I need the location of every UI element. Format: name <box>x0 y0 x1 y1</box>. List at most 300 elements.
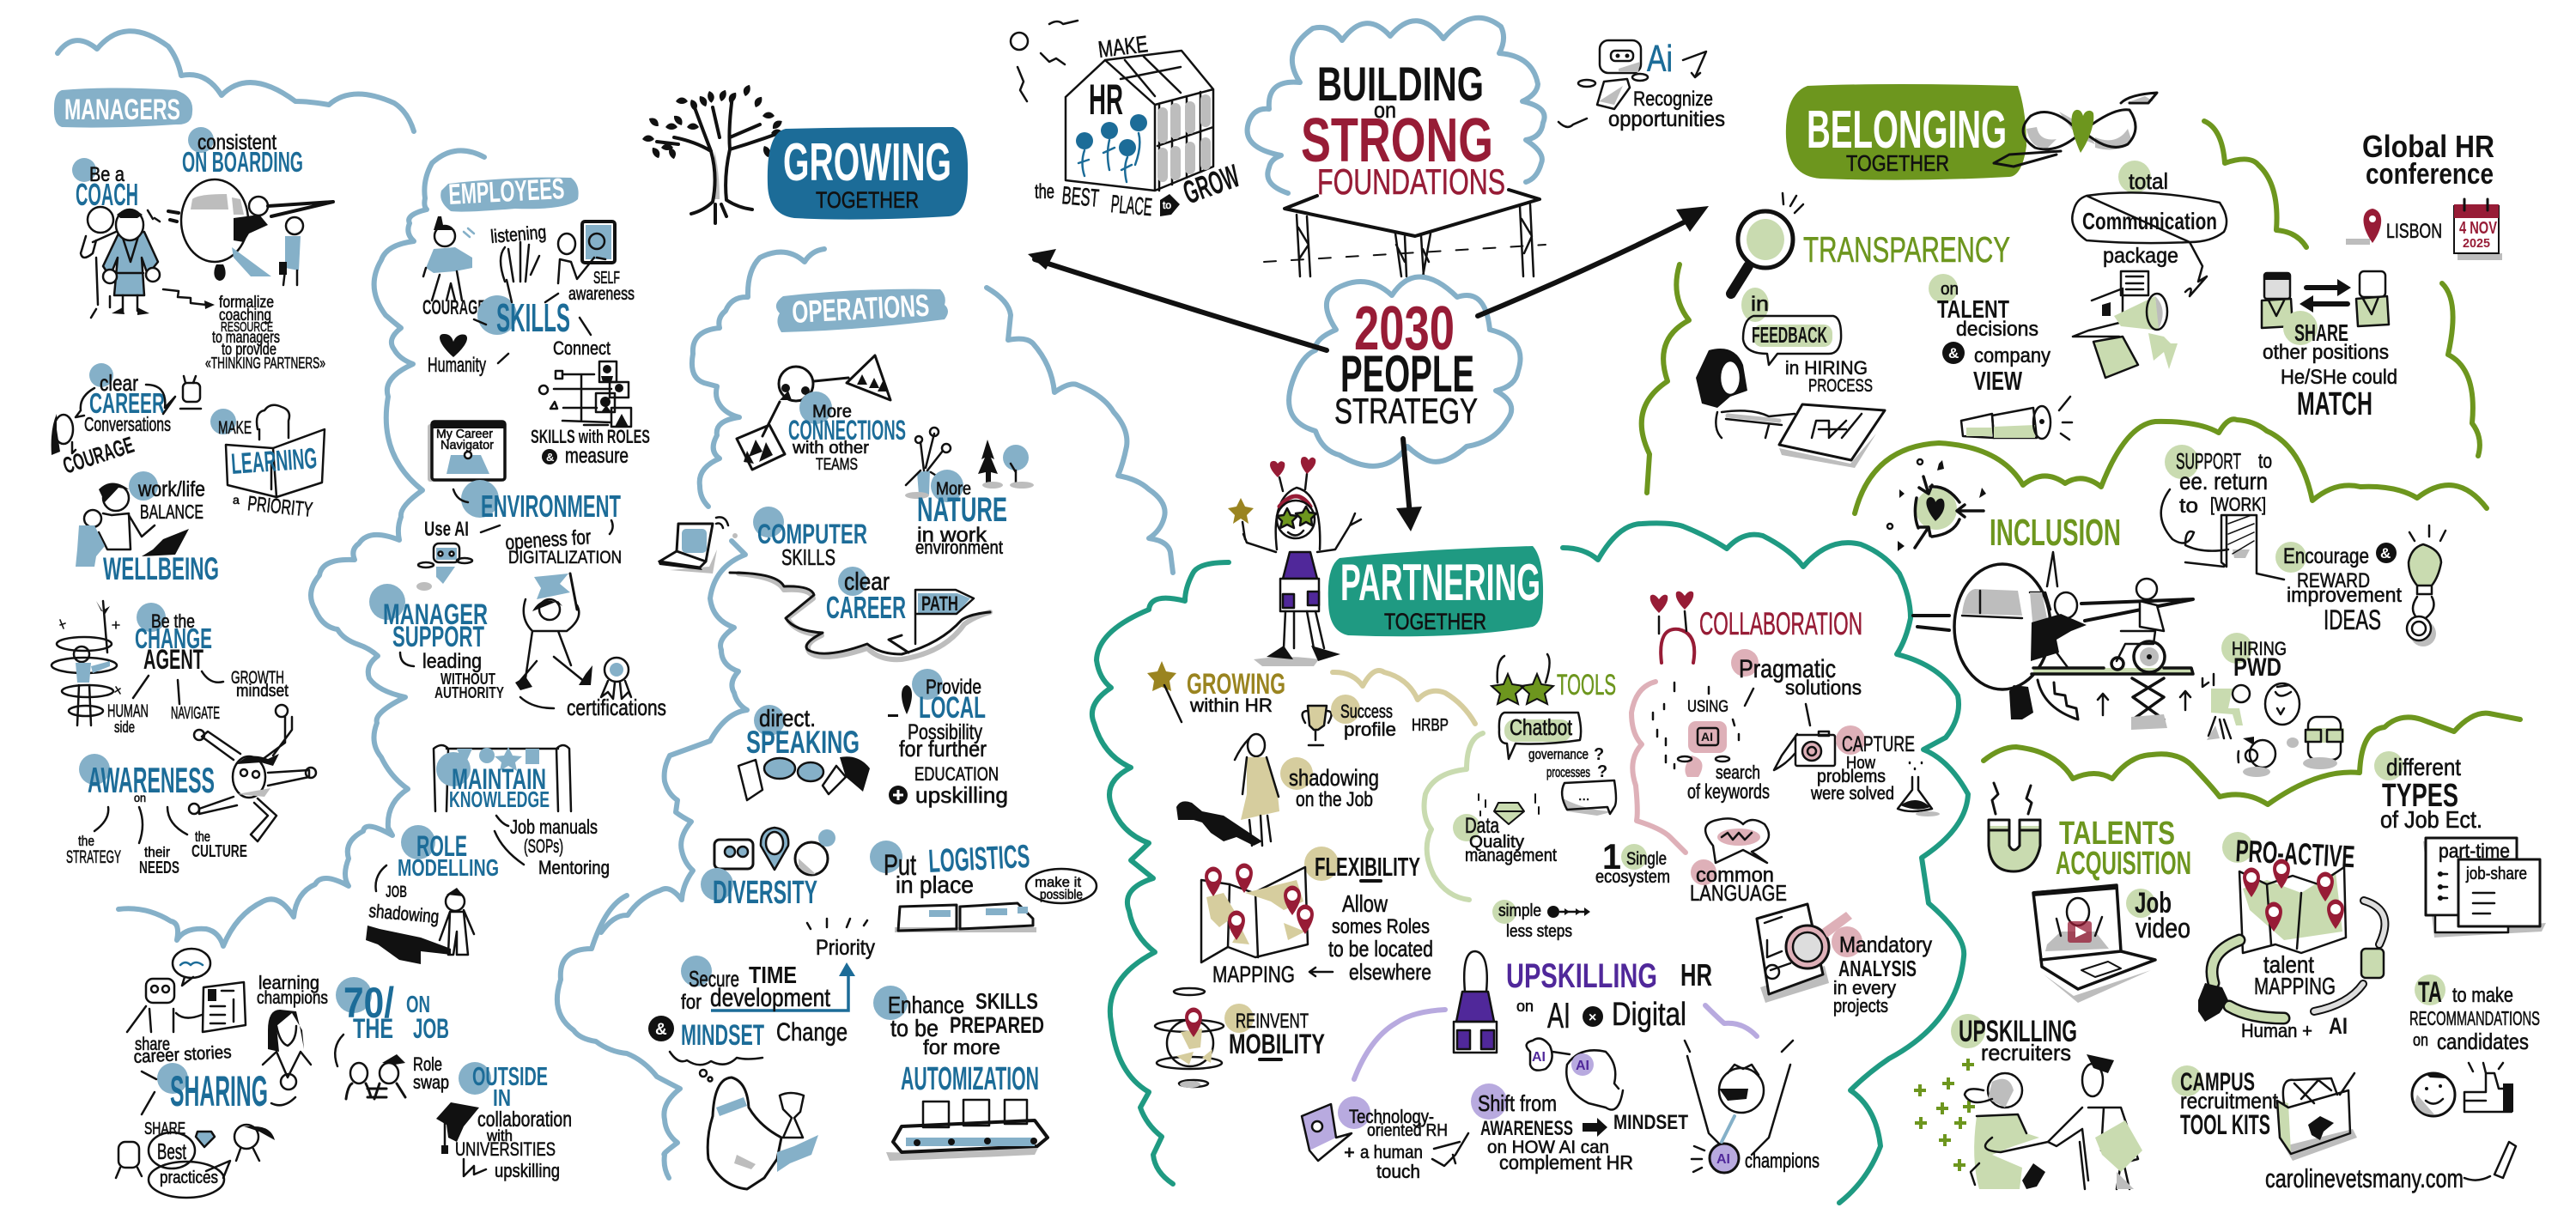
text: formalize coaching resource <box>204 294 325 372</box>
manager support: AUTHORITY <box>434 684 504 701</box>
clear career conversations: CAREER <box>89 387 165 419</box>
icon: recruiters handshake <box>1965 1054 2142 1189</box>
growing together pill <box>768 127 968 220</box>
title: foundations: FOUNDATIONS <box>1317 161 1505 202</box>
more connections: TEAMS <box>816 456 858 474</box>
support return to work: to <box>2258 450 2272 473</box>
seventy percent on the job: 70/ <box>343 979 394 1027</box>
panel: change agent <box>52 601 316 877</box>
text: self awareness: awareness <box>568 284 635 304</box>
text: change agent branches: mindset <box>236 682 289 701</box>
success profile hrbp <box>1303 695 1449 745</box>
title: strong: STRONG <box>1301 106 1493 175</box>
awareness: on <box>134 791 146 804</box>
direct speaking: direct. <box>759 705 816 731</box>
provide local: upskilling <box>915 782 1008 808</box>
be the change agent: CHANGE <box>135 622 212 654</box>
operations label pill: OPERATIONS <box>791 288 930 330</box>
different types of job: different <box>2386 754 2461 780</box>
provide local: Provide <box>926 676 981 699</box>
belonging label pill: BELONGING <box>1807 100 2007 160</box>
support return to work: ee. return <box>2179 468 2268 495</box>
direct speaking <box>738 705 870 800</box>
secure time priority: Change <box>776 1018 848 1047</box>
panel: make HR best place to grow <box>1011 21 1244 222</box>
make learning a priority: a <box>233 493 240 507</box>
capture how problems were solved: How <box>1846 754 1875 773</box>
text: make: MAKE <box>1097 31 1149 63</box>
share career stories: career stories <box>133 1042 232 1067</box>
capture how problems were solved: problems <box>1817 767 1886 786</box>
icon: sun and birds <box>1011 21 1078 101</box>
awareness: AWARENESS <box>88 760 215 800</box>
icon: career conversation faces <box>52 376 201 455</box>
provide local: for further <box>899 736 987 762</box>
icon: magnet <box>1989 783 2040 871</box>
pro active heading: PRO-ACTIVE <box>2235 833 2356 874</box>
share other positions match: other positions <box>2263 341 2389 364</box>
single ecosystem: ecosystem <box>1595 867 1670 887</box>
ta to make recommendations: TA <box>2418 976 2442 1009</box>
consistent onboarding <box>182 127 303 178</box>
title: building on <box>1317 57 1484 123</box>
title: building on: on <box>1374 97 1396 123</box>
using ai search keywords: USING <box>1687 698 1728 716</box>
data quality management: management <box>1465 846 1557 865</box>
diversity heading: DIVERSITY <box>713 875 817 911</box>
upskilling hr heading: on <box>1516 998 1534 1015</box>
connect skills with roles <box>531 337 650 468</box>
icon: calendar 4 nov 2025: 4 NOV <box>2459 219 2497 238</box>
text: self awareness: SELF <box>593 269 620 288</box>
awareness: CULTURE <box>191 842 247 861</box>
text: HR: HR <box>1089 76 1123 124</box>
panel: 2030 people strategy core <box>1289 276 1521 466</box>
icon: my career navigator window: My Career <box>436 427 493 441</box>
shift from awareness to mindset <box>1471 1083 1688 1174</box>
enhance skills automization: PREPARED <box>950 1012 1044 1038</box>
icon: train with bubble: make it <box>1035 874 1081 890</box>
icon: woman with flag <box>515 574 592 690</box>
using ai search keywords: search <box>1716 762 1760 783</box>
growing within hr: GROWING <box>1187 668 1285 701</box>
icon: share positions people <box>2262 271 2389 328</box>
share other positions match <box>2263 311 2397 422</box>
chatbot bubble: ? <box>1597 762 1607 781</box>
clear career conversations <box>60 363 175 479</box>
on talent decisions company view: decisions <box>1956 318 2038 341</box>
manager support: leading <box>422 650 482 673</box>
make learning a priority: LEARNING <box>230 442 318 481</box>
icon: courage figure <box>423 216 474 300</box>
connect skills with roles: Connect <box>553 337 611 359</box>
clear career path <box>826 567 974 644</box>
icon: coach with boxer <box>81 207 160 318</box>
icon: talent map with arms <box>2198 859 2385 1022</box>
put logistics in place <box>870 839 1030 898</box>
ta to make recommendations: candidates <box>2437 1029 2529 1054</box>
chatbot bubble: Chatbot <box>1510 714 1573 740</box>
on talent decisions company view: TALENT <box>1937 296 2009 324</box>
icon: whirlwind woman <box>52 601 120 725</box>
icon: my career navigator window: Navigator <box>440 438 494 452</box>
enhance skills automization: AUTOMIZATION <box>901 1061 1039 1097</box>
icon: hooded figure with hourglass <box>670 1052 818 1189</box>
icon: diversity faces <box>714 828 835 875</box>
chatbot bubble: governance <box>1528 746 1589 762</box>
more nature: NATURE <box>917 491 1007 529</box>
icon: face with thumbs up <box>2412 1063 2513 1116</box>
awareness: the <box>195 829 210 845</box>
single ecosystem: Single <box>1626 849 1667 869</box>
mandatory analysis <box>1832 926 1932 1017</box>
seventy percent on the job <box>335 977 449 1066</box>
pragmatic solutions <box>1731 649 1862 725</box>
work life balance wellbeing: BALANCE <box>140 501 204 523</box>
text: change agent branches: GROWTH <box>231 668 284 688</box>
icon: dots speech bubble <box>1562 780 1616 816</box>
icon: plus signs <box>1914 1059 1975 1171</box>
technology oriented human touch: a human <box>1360 1143 1423 1162</box>
tools <box>1492 654 1616 704</box>
more nature <box>905 428 1034 558</box>
panel: building on strong foundations <box>1248 18 1546 466</box>
technology oriented human touch <box>1338 1096 1468 1182</box>
secure time priority: TIME <box>749 962 797 988</box>
icon: job documents: part-time <box>2439 840 2510 862</box>
learning champions with woman: champions <box>257 988 328 1008</box>
clear career path: PATH <box>921 592 958 616</box>
hiring pwd: PWD <box>2233 653 2281 682</box>
in feedback hiring process: PROCESS <box>1808 376 1873 396</box>
panel: 2030 people strategy core: STRATEGY <box>1334 391 1478 431</box>
more nature: More <box>936 479 971 499</box>
work life balance wellbeing <box>103 471 219 586</box>
icon: train with bubble: possible <box>1040 888 1083 902</box>
campus recruitment tool kits: recruitment <box>2180 1088 2279 1114</box>
encourage reward improvement ideas: REWARD <box>2297 569 2370 592</box>
be a coach: COACH <box>76 177 138 212</box>
success profile hrbp: Success <box>1340 701 1393 722</box>
panel: sharing <box>116 949 572 1198</box>
collaboration: COLLABORATION <box>1699 606 1862 641</box>
icon: job documents: job-share <box>2465 865 2527 883</box>
icon: globe reinvent mobility: REINVENT <box>1236 1010 1309 1033</box>
hiring pwd <box>2221 633 2287 682</box>
text: formalize coaching resource: «THINKING PARTNERS» <box>205 355 325 372</box>
icon: ai brain: AI <box>1532 1050 1546 1065</box>
on talent decisions company view <box>1929 274 2050 396</box>
icon: ai champion <box>1685 1041 1793 1173</box>
growing together pill: GROWING <box>783 133 951 192</box>
icon: diverse abilities figures <box>2202 674 2344 777</box>
icon: airplane with lift and wheelchair <box>1913 552 2193 730</box>
upskilling recruiters <box>1951 1014 2077 1065</box>
openness for digitalization: DIGITALIZATION <box>508 548 622 568</box>
on talent decisions company view: company <box>1974 344 2050 367</box>
icon: flask <box>1898 762 1940 816</box>
make learning a priority: PRIORITY <box>246 492 313 522</box>
flexibility <box>1304 847 1433 985</box>
put logistics in place: Put <box>884 849 916 882</box>
listening with hand <box>489 221 547 282</box>
icon: laptop wifi <box>658 517 738 574</box>
success profile hrbp: HRBP <box>1412 716 1449 735</box>
in feedback hiring process: FEEDBACK <box>1752 322 1827 348</box>
arrow: to belonging <box>1478 206 1709 316</box>
mandatory analysis: in every <box>1833 977 1896 998</box>
shift from awareness to mindset: on HOW AI can <box>1487 1138 1609 1157</box>
job shadowing: JOB <box>386 883 407 901</box>
pragmatic solutions: solutions <box>1785 677 1862 700</box>
icon: self awareness mirror <box>558 222 615 283</box>
title: building on: BUILDING <box>1317 57 1484 111</box>
text: talent mapping human ai: MAPPING <box>2254 973 2336 999</box>
talents acquisition heading: ACQUISITION <box>2056 846 2191 882</box>
secure time priority: for <box>681 991 702 1014</box>
growing within hr <box>1147 661 1285 722</box>
flexibility: somes Roles <box>1332 915 1430 938</box>
maintain knowledge: MAINTAIN <box>452 763 546 796</box>
sharing heading: SHARING <box>170 1067 268 1115</box>
collaboration with universities: upskilling <box>495 1160 560 1181</box>
awareness: STRATEGY <box>66 847 121 867</box>
pragmatic solutions: Pragmatic <box>1739 655 1836 683</box>
tools: TOOLS <box>1557 669 1616 701</box>
text: the best place to grow: GROW <box>1179 158 1244 211</box>
outside in: IN <box>493 1084 511 1111</box>
text: formalize coaching resource: RESOURCE <box>221 320 273 335</box>
managers label pill: MANAGERS <box>64 94 180 126</box>
flexibility: elsewhere <box>1349 959 1431 985</box>
shift from awareness to mindset: MINDSET <box>1613 1111 1688 1134</box>
technology oriented human touch: touch <box>1376 1161 1420 1182</box>
icon: ai robot <box>1578 40 1648 109</box>
panel: belonging together <box>1642 84 2502 493</box>
text: talent mapping human ai: AI <box>2329 1013 2348 1039</box>
maintain knowledge <box>434 745 571 812</box>
be a coach <box>72 158 138 212</box>
shadowing on the job: shadowing <box>1289 765 1379 791</box>
learning champions with woman <box>257 972 328 1090</box>
role swap <box>346 1053 449 1099</box>
more nature: environment <box>915 537 1003 558</box>
ta to make recommendations <box>2409 974 2540 1054</box>
icon: airplane onboarding <box>168 179 333 285</box>
simple less steps: less steps <box>1506 922 1572 941</box>
upskilling recruiters: UPSKILLING <box>1959 1015 2077 1048</box>
skills <box>474 280 591 363</box>
job shadowing <box>366 883 474 964</box>
text: courage: COURAGE <box>422 296 486 319</box>
common language: common <box>1696 864 1774 887</box>
data quality management <box>1453 794 1557 865</box>
total communication package: total <box>2129 168 2168 194</box>
text: ai recognize opportunities <box>1558 38 1725 131</box>
secure time priority <box>648 919 875 1052</box>
be the change agent: Be the <box>151 610 195 632</box>
put logistics in place: LOGISTICS <box>927 839 1030 880</box>
icon: analysis document magnifier <box>1757 904 1852 1003</box>
share other positions match: SHARE <box>2294 319 2348 346</box>
text: the best place to grow: BEST <box>1060 182 1100 213</box>
support return to work: SUPPORT <box>2176 448 2241 474</box>
encourage reward improvement ideas <box>2275 542 2402 635</box>
encourage reward improvement ideas: & <box>2380 545 2391 561</box>
clear career path: clear <box>844 568 890 596</box>
single ecosystem <box>1595 836 1670 887</box>
encourage reward improvement ideas: improvement <box>2287 584 2402 607</box>
text: ai recognize opportunities: opportunities <box>1608 107 1725 131</box>
common language: LANGUAGE <box>1690 880 1787 906</box>
text: global hr conference lisbon: conference <box>2366 158 2494 191</box>
diversity heading <box>701 868 817 911</box>
icon: job documents <box>2423 838 2546 938</box>
connect skills with roles: & <box>546 451 554 464</box>
text: global hr conference lisbon: Global HR <box>2362 129 2494 164</box>
success profile hrbp: profile <box>1344 719 1396 740</box>
pink cloud line <box>1631 682 1686 853</box>
text: mapping: MAPPING <box>1212 962 1295 987</box>
in feedback hiring process: in <box>1751 293 1769 316</box>
share career stories: share <box>135 1035 170 1054</box>
text: job video: video <box>2136 913 2190 944</box>
icon: ai brain <box>1527 1039 1623 1109</box>
light green cloud line <box>1425 733 1483 900</box>
shift from awareness to mindset: Shift from <box>1478 1090 1557 1116</box>
role modelling <box>376 825 499 891</box>
transparency <box>1731 193 2010 294</box>
icon: woman at maze board <box>1696 349 1885 468</box>
job manuals sop mentoring: Job manuals <box>510 816 598 838</box>
awareness <box>66 754 247 877</box>
arrow: to growing <box>1028 249 1327 350</box>
simple less steps <box>1492 900 1590 941</box>
icon: partnering character <box>1228 457 1361 666</box>
icon: winding career road <box>730 573 990 659</box>
panel: managers <box>52 31 414 586</box>
panel: talents acquisition <box>1914 713 2546 1193</box>
clear career path: CAREER <box>826 590 906 625</box>
more connections: with other <box>792 439 869 458</box>
secure time priority: Priority <box>816 936 875 960</box>
text: champions: champions <box>1745 1150 1820 1173</box>
panel: growing together header <box>642 83 968 223</box>
credit: carolinevetsmany.com: carolinevetsmany.com <box>2265 1163 2464 1193</box>
ta to make recommendations: on <box>2413 1031 2428 1050</box>
certifications with ribbon: certifications <box>567 695 666 720</box>
text: global hr conference lisbon: LISBON <box>2386 220 2442 243</box>
panel: inclusion <box>1855 419 2487 777</box>
icon: my career navigator window <box>428 422 505 482</box>
campus recruitment tool kits: CAMPUS <box>2180 1068 2255 1096</box>
different types of job <box>2374 751 2482 833</box>
job manuals sop mentoring: Mentoring <box>538 857 610 878</box>
seventy percent on the job: ON <box>406 991 430 1017</box>
icon: career stories man with CV <box>127 949 246 1032</box>
total communication package: Communication <box>2082 208 2217 234</box>
different types of job: TYPES <box>2382 778 2458 814</box>
skills: SKILLS <box>496 295 570 340</box>
icon: ai brain: AI <box>1576 1059 1589 1073</box>
computer skills <box>753 507 867 570</box>
upskilling hr heading: AI <box>1547 995 1571 1035</box>
icon: lightbulb medal <box>2407 525 2445 646</box>
pro active heading <box>2222 832 2356 874</box>
outside in: OUTSIDE <box>472 1061 548 1091</box>
icon: foundation platform <box>1264 190 1546 276</box>
share best practices <box>116 1120 275 1198</box>
total communication package <box>2072 161 2227 296</box>
seventy percent on the job: JOB <box>413 1013 449 1044</box>
enhance skills automization: Enhance <box>888 992 964 1018</box>
manager support: SUPPORT <box>392 621 484 653</box>
icon: laptop job video <box>2033 885 2155 1003</box>
be a coach: Be a <box>89 163 125 186</box>
icon: conveyor belt <box>886 1100 1048 1161</box>
data quality management: Quality <box>1469 833 1524 852</box>
employees label pill: EMPLOYEES <box>447 173 565 211</box>
maintain knowledge: KNOWLEDGE <box>449 786 550 812</box>
panel: 2030 people strategy core: 2030 <box>1354 294 1455 363</box>
sharing heading <box>142 1063 295 1115</box>
role swap: swap <box>413 1071 449 1093</box>
work life balance wellbeing: work/life <box>137 477 205 501</box>
text: the best place to grow: to <box>1163 199 1171 211</box>
support return to work <box>2161 445 2284 580</box>
data quality management: Data <box>1465 814 1499 838</box>
technology oriented human touch: + <box>1344 1142 1355 1163</box>
icon: graduation cap <box>436 1102 479 1154</box>
more connections: CONNECTIONS <box>788 415 906 446</box>
consistent onboarding: ON BOARDING <box>182 146 303 178</box>
campus recruitment tool kits <box>2172 1065 2279 1140</box>
operations label pill <box>776 288 948 332</box>
single ecosystem: 1 <box>1602 836 1621 877</box>
more connections <box>737 355 906 474</box>
text: ai recognize opportunities: Recognize <box>1633 88 1713 111</box>
belonging label pill: TOGETHER <box>1846 150 1949 176</box>
talents acquisition heading <box>2056 816 2191 882</box>
text: change agent branches: side <box>114 719 135 736</box>
role swap: Role <box>413 1053 442 1075</box>
icon: infinity heart ribbon <box>1994 93 2157 167</box>
manager support: WITHOUT <box>440 671 495 688</box>
environment: ENVIRONMENT <box>481 489 621 524</box>
text: change agent branches <box>107 668 289 736</box>
share best practices: SHARE <box>144 1120 185 1138</box>
text: formalize coaching resource: formalize <box>219 294 274 312</box>
be the change agent: AGENT <box>143 644 204 675</box>
common language <box>1690 818 1787 906</box>
consistent onboarding: consistent <box>197 130 276 155</box>
icon: calendar 4 nov 2025 <box>2454 199 2502 260</box>
environment <box>453 480 621 534</box>
technology oriented human touch: oriented RH <box>1367 1121 1448 1140</box>
support return to work: [WORK] <box>2210 494 2266 515</box>
more connections: More <box>812 402 852 422</box>
icon: woman many arms <box>189 705 316 841</box>
certifications with ribbon <box>520 658 666 720</box>
text: the best place to grow: PLACE <box>1109 191 1153 222</box>
icon: globe reinvent mobility <box>1155 988 1325 1088</box>
openness for digitalization <box>505 525 622 568</box>
using ai search keywords: of keywords <box>1687 780 1770 804</box>
employees label pill <box>440 173 579 212</box>
inclusion heading: INCLUSION <box>1990 512 2121 554</box>
role modelling: MODELLING <box>398 854 499 881</box>
panel: employees <box>118 150 666 964</box>
